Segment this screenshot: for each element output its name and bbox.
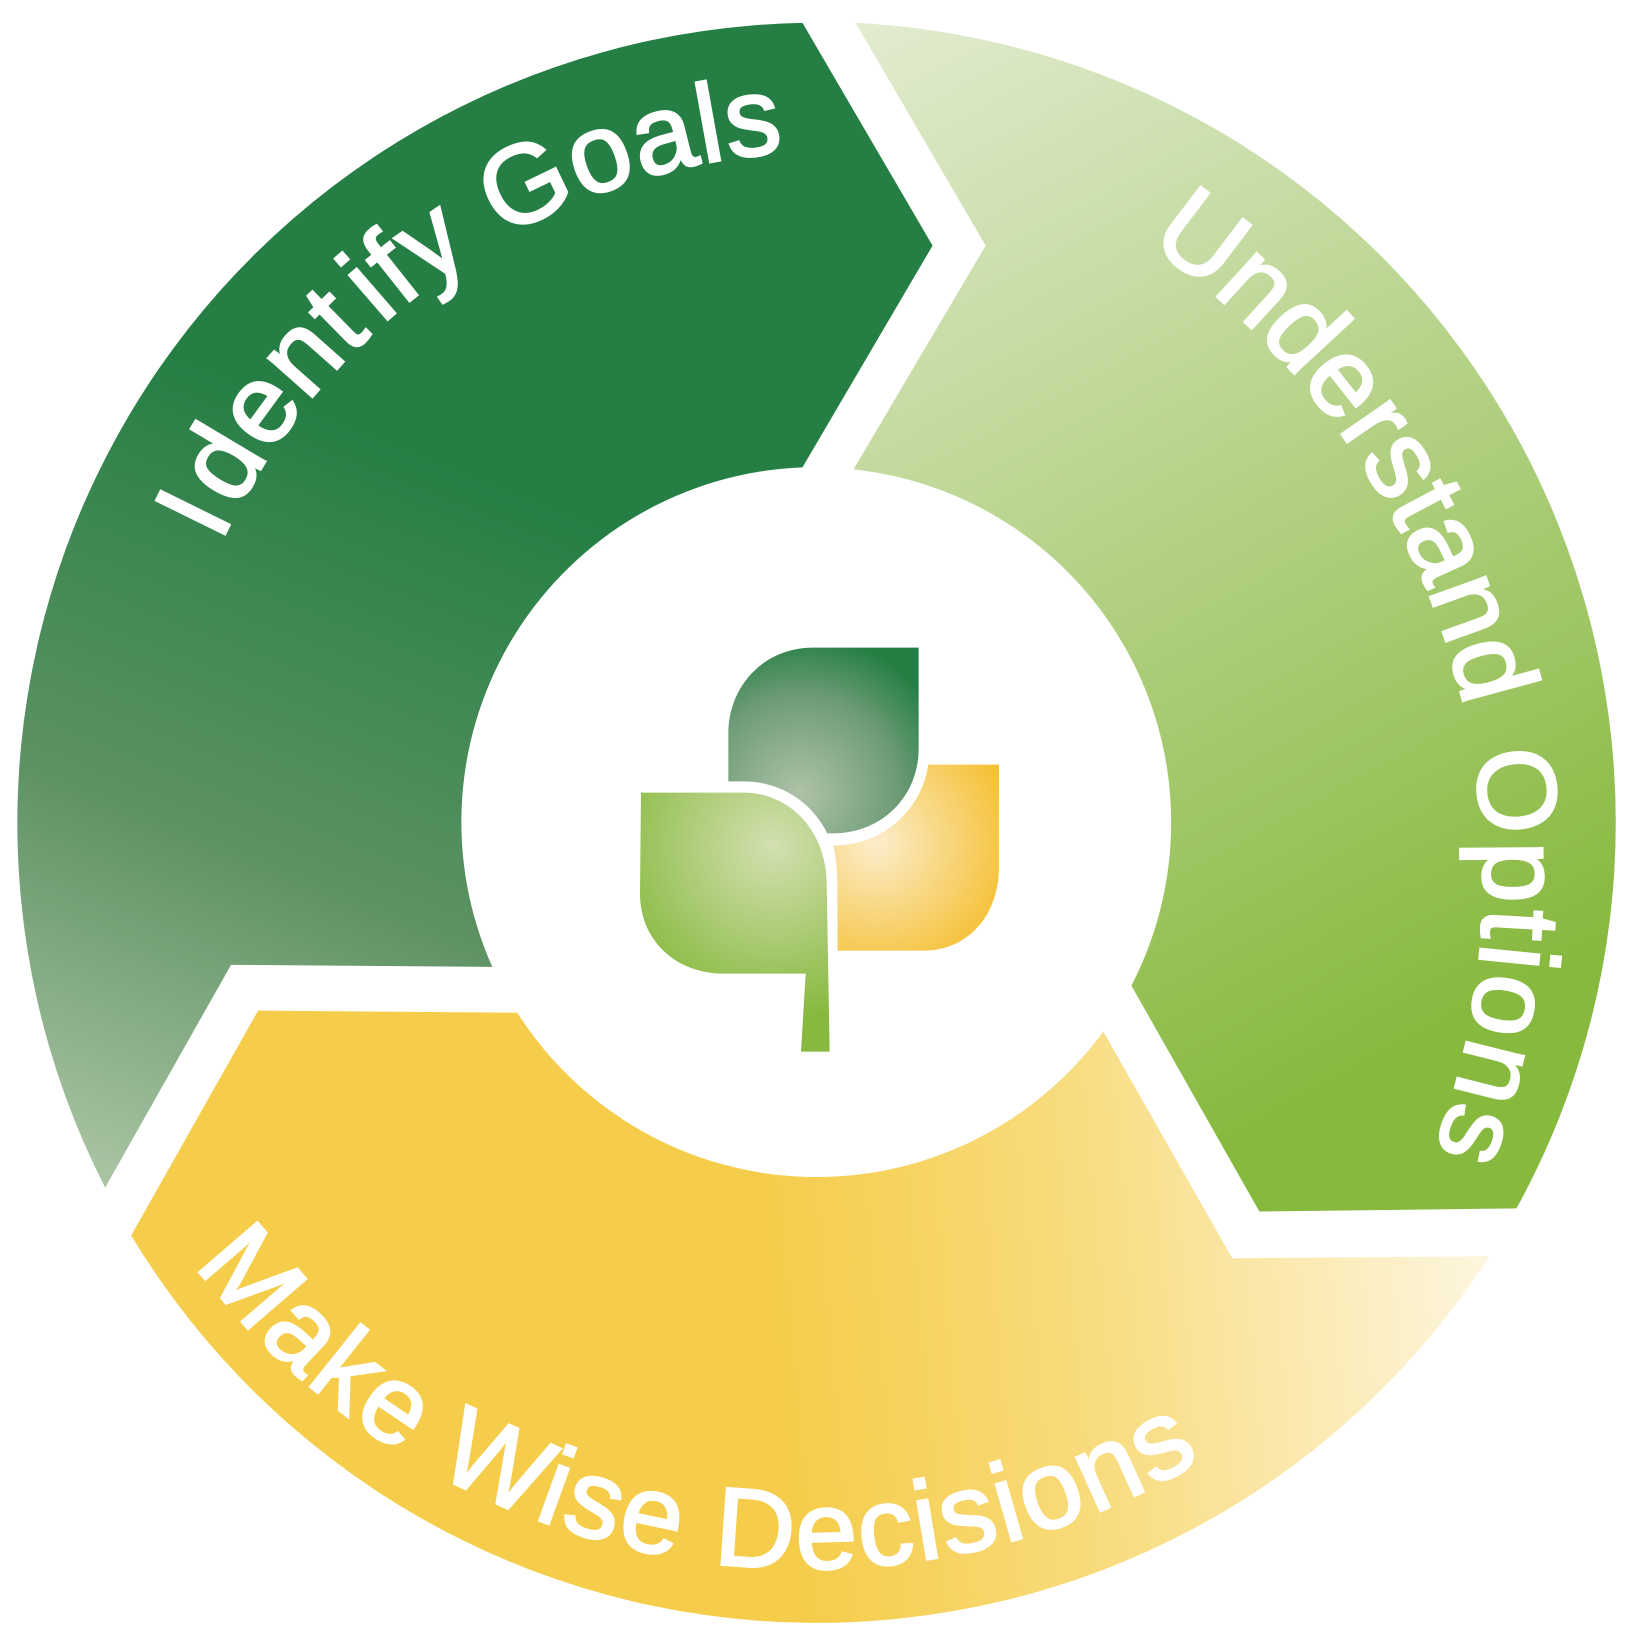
leaf: dark green — [728, 648, 919, 833]
segment shape: yellow arrow — [131, 1011, 1489, 1623]
segment shape: dark green arrow — [17, 23, 933, 1188]
leaf and stem: light green — [640, 793, 830, 1052]
icon: central three-leaf tree logo — [640, 648, 999, 1052]
label: Make Wise Decisions: Make Wise Decisions — [198, 1220, 1194, 1571]
label: Understand Options: Understand Options — [1163, 185, 1562, 1162]
segment shape: light green arrow — [853, 23, 1616, 1212]
leaf: yellow — [833, 765, 999, 951]
label: Identify Goals: Identify Goals — [154, 79, 780, 536]
